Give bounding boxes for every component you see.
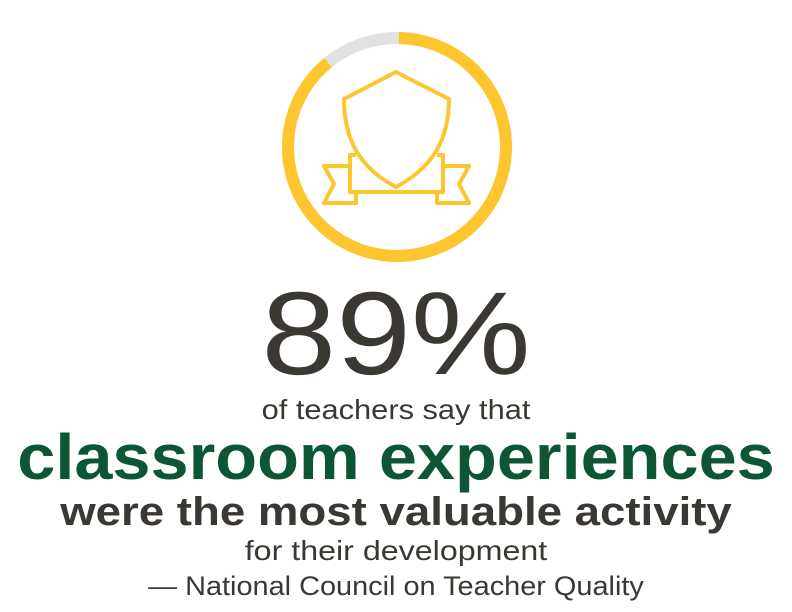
ring track: [286, 36, 508, 258]
big number: 89%: [261, 268, 531, 400]
icon: progress ring with shield: [282, 32, 512, 262]
text: lead-in: of teachers say that: [262, 394, 530, 425]
headline: classroom experiences: classroom experiences: [17, 421, 775, 493]
icon: shield and ribbon: [324, 72, 469, 203]
text: ending: for their development: [245, 535, 547, 566]
text: subheadline: were the most valuable activity: [60, 490, 732, 534]
source: — National Council on Teacher Quality: [148, 571, 644, 601]
